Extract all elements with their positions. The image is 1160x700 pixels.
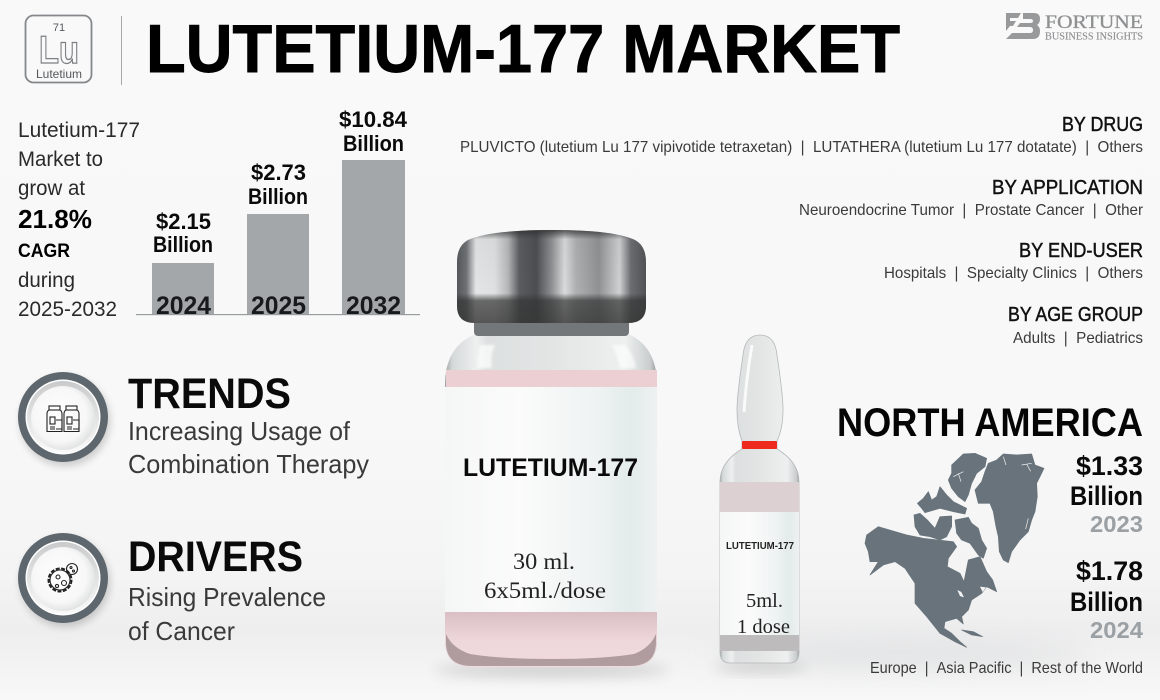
vial label: LUTETIUM-177 bbox=[463, 454, 638, 482]
segment: by application: BY APPLICATION bbox=[992, 177, 1143, 199]
vial liquid bbox=[445, 612, 657, 667]
text: CAGR statement: Lutetium-177 bbox=[18, 119, 140, 142]
icon: drivers medallion bbox=[18, 533, 110, 627]
panel: regional: 2023 bbox=[1090, 511, 1143, 537]
icon: trends medallion bbox=[18, 372, 110, 466]
bar: 2032: Billion bbox=[343, 131, 404, 156]
icon: lutetium element tile: 71 bbox=[53, 22, 65, 34]
bar: 2025: Billion bbox=[248, 184, 308, 209]
bar: 2024 bbox=[152, 209, 214, 320]
panel: regional: 2024 bbox=[1090, 617, 1143, 643]
segment: by end-user: BY END-USER bbox=[1019, 240, 1143, 262]
panel: drivers: DRIVERS bbox=[128, 533, 303, 581]
panel: trends: TRENDS bbox=[128, 370, 291, 418]
panel: trends: Increasing Usage of bbox=[128, 416, 351, 446]
icon: lutetium element tile: Lu bbox=[39, 29, 79, 72]
vial label bbox=[445, 387, 657, 612]
bar: 2032: $10.84 bbox=[339, 107, 408, 132]
segment: by application: Neuroendocrine Tumor | Prostate Cancer | Other bbox=[799, 202, 1144, 219]
text: CAGR statement: 2025-2032 bbox=[18, 298, 117, 321]
large vial bbox=[434, 230, 670, 676]
vial cap bbox=[457, 230, 646, 336]
segment: by age group: BY AGE GROUP bbox=[1008, 304, 1143, 326]
segment: by age group: Adults | Pediatrics bbox=[1013, 330, 1143, 347]
segment: by end-user: Hospitals | Specialty Clinics | Others bbox=[884, 265, 1143, 282]
ampoule label: 1 dose bbox=[737, 616, 790, 638]
segment: by age group bbox=[1008, 304, 1143, 347]
icon: lutetium element tile: Lutetium bbox=[36, 67, 82, 81]
text: CAGR statement: Market to bbox=[18, 148, 103, 171]
segment: by drug: PLUVICTO (lutetium Lu 177 vipivotide tetraxetan) | LUTATHERA (lutetium Lu 177 dotatate) | Others bbox=[460, 139, 1143, 156]
text: CAGR statement: CAGR bbox=[18, 241, 70, 262]
title: LUTETIUM-177 MARKET bbox=[146, 11, 900, 87]
bar chart: market size bbox=[136, 107, 420, 320]
ampoule label: LUTETIUM-177 bbox=[726, 541, 794, 552]
text: CAGR statement: during bbox=[18, 269, 75, 292]
panel: drivers: Rising Prevalence bbox=[128, 582, 326, 612]
bar: 2025: $2.73 bbox=[251, 160, 306, 185]
bar: 2025 bbox=[247, 160, 309, 320]
ampoule label: 5ml. bbox=[746, 590, 783, 612]
ampoule label bbox=[720, 512, 799, 638]
vial label: 6x5ml./dose bbox=[484, 578, 606, 603]
small ampoule bbox=[714, 335, 806, 671]
segment: by drug bbox=[460, 114, 1143, 156]
vial glass body bbox=[445, 333, 657, 667]
bar: 2025: 2025 bbox=[251, 292, 306, 320]
panel: trends: Combination Therapy bbox=[128, 449, 369, 479]
panel: regional bbox=[837, 401, 1143, 677]
panel: drivers: of Cancer bbox=[128, 616, 235, 646]
segment: by drug: BY DRUG bbox=[1062, 114, 1143, 136]
text: CAGR statement: grow at bbox=[18, 177, 85, 200]
logo: Fortune Business Insights: BUSINESS INSIGHTS bbox=[1045, 32, 1143, 42]
segment: by end-user bbox=[884, 240, 1143, 282]
bar: 2024: Billion bbox=[153, 232, 213, 257]
panel: drivers bbox=[18, 533, 326, 646]
map: North America bbox=[865, 453, 1044, 647]
logo: Fortune Business Insights: FORTUNE bbox=[1045, 12, 1143, 33]
panel: segmentation bbox=[460, 114, 1144, 347]
panel: regional: Billion bbox=[1070, 587, 1143, 617]
bar: 2032 bbox=[339, 107, 408, 320]
panel: regional: $1.78 bbox=[1076, 556, 1143, 586]
icon: lutetium element tile bbox=[26, 16, 92, 82]
panel: regional: $1.33 bbox=[1076, 451, 1143, 481]
segment: by application bbox=[799, 177, 1144, 219]
ampoule glass bbox=[720, 335, 799, 663]
panel: regional: Billion bbox=[1070, 481, 1143, 511]
panel: trends bbox=[18, 370, 369, 479]
ampoule red band bbox=[742, 441, 777, 449]
bar: 2032: 2032 bbox=[346, 292, 401, 320]
logo: Fortune Business Insights bbox=[1006, 12, 1143, 42]
vial label: 30 ml. bbox=[513, 549, 575, 574]
text: CAGR statement: 21.8% bbox=[18, 204, 92, 234]
bar: 2024: $2.15 bbox=[156, 209, 211, 234]
text: CAGR statement bbox=[18, 119, 140, 321]
bar: 2024: 2024 bbox=[156, 292, 211, 320]
